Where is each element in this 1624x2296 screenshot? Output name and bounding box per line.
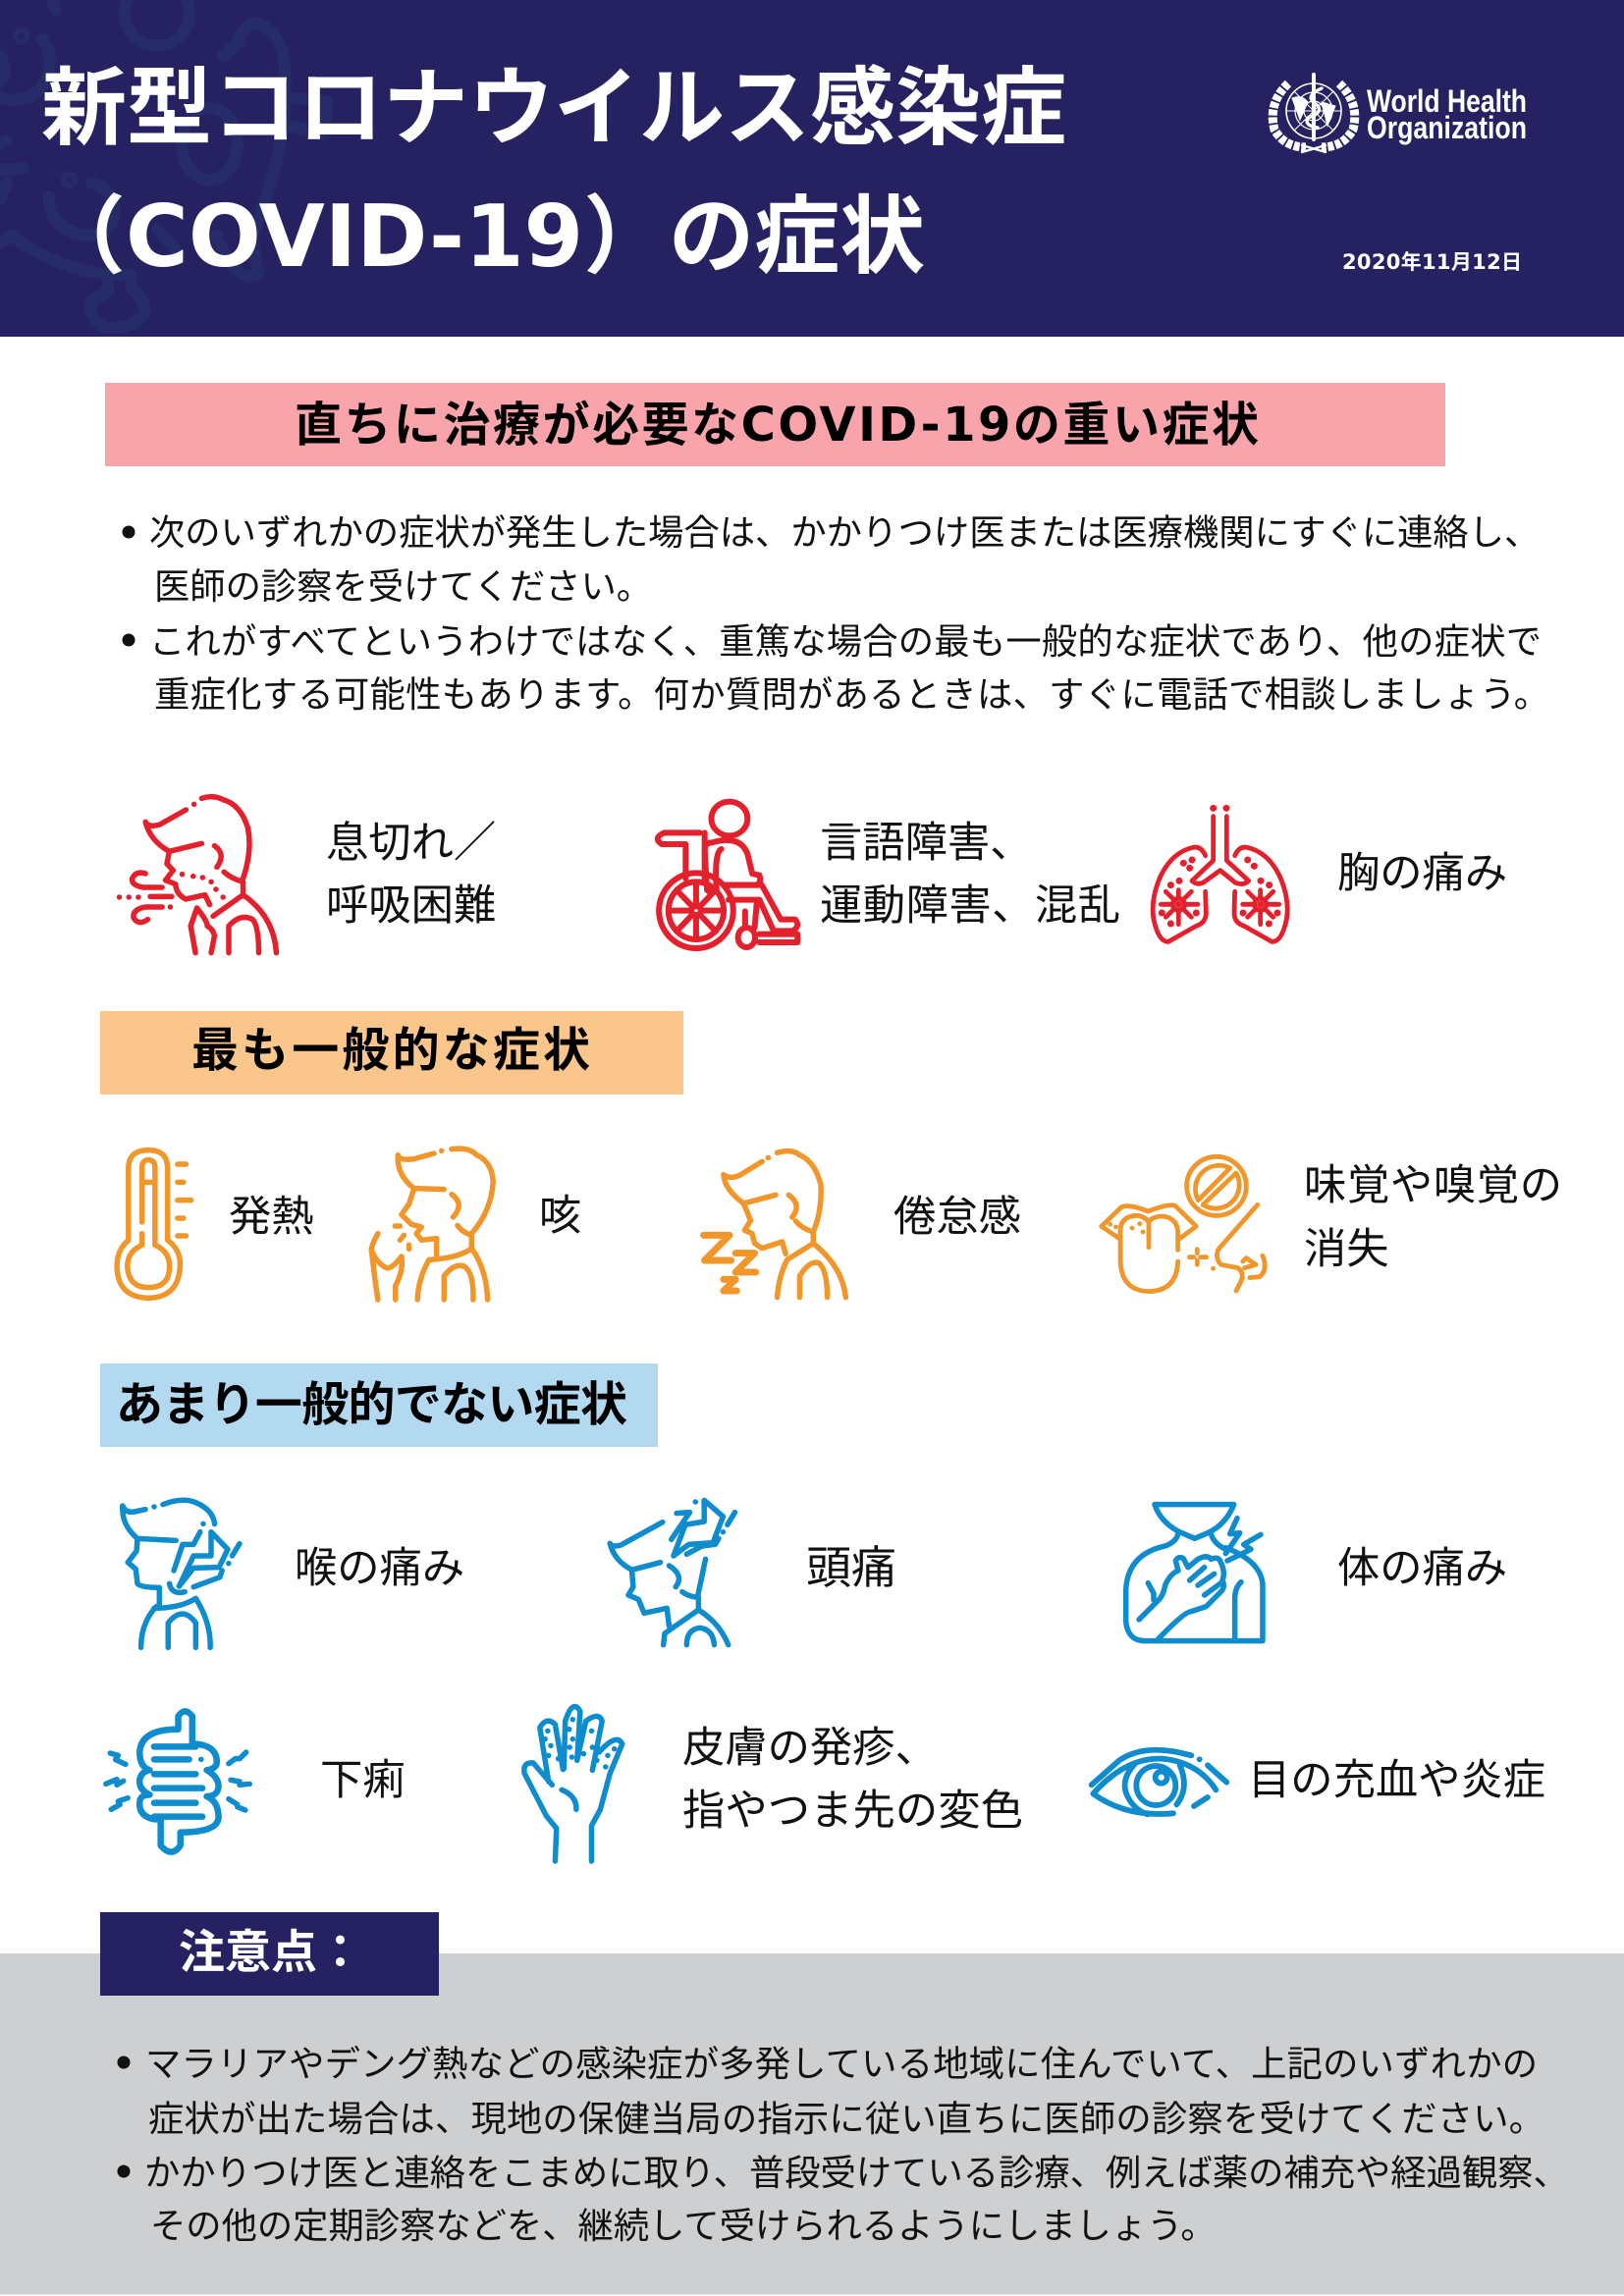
WHO wordmark — [1367, 83, 1527, 145]
icon: loss of taste and smell — [1102, 1156, 1265, 1292]
icon: thermometer — [117, 1150, 191, 1298]
panel: less common symptoms heading: あまり一般的でない症状 — [116, 1379, 627, 1431]
label: sore throat: 喉の痛み — [295, 1545, 464, 1592]
label: rash and discolouration — [682, 1725, 1023, 1835]
text block: notes: 症状が出た場合は、現地の保健当局の指示に従い直ちに医師の診察を受けてください。 — [148, 2099, 1544, 2139]
label: shortness of breath: 息切れ／ — [326, 820, 496, 867]
panel: most common symptoms heading — [100, 1011, 683, 1095]
icon: sore throat — [123, 1500, 240, 1647]
icon: hand with rash — [524, 1706, 623, 1861]
label: body aches: 体の痛み — [1337, 1545, 1507, 1592]
panel: notes heading: 注意点： — [179, 1926, 363, 1978]
label: cough: 咳 — [539, 1193, 581, 1240]
label: speech and motor impairment — [820, 820, 1120, 930]
label: rash and discolouration: 皮膚の発疹、 — [682, 1725, 938, 1772]
icon: WHO emblem — [1272, 75, 1355, 152]
icon: diarrhoea — [106, 1711, 249, 1852]
label: loss of taste and smell: 消失 — [1304, 1226, 1389, 1273]
text block: severe symptoms advice — [122, 512, 1549, 715]
text block: severe symptoms advice: 医師の診察を受けてください。 — [154, 566, 652, 607]
label: fever: 発熱 — [229, 1194, 314, 1241]
icon: cough — [371, 1148, 493, 1300]
label: loss of taste and smell — [1304, 1162, 1562, 1273]
icon: shortness of breath — [120, 797, 276, 953]
label: diarrhoea: 下痢 — [320, 1757, 406, 1804]
title: （COVID-19）の症状 — [40, 187, 925, 287]
label: chest pain: 胸の痛み — [1337, 850, 1507, 897]
text block: severe symptoms advice: 次のいずれかの症状が発生した場合は、かかりつけ医または医療機関にすぐに連絡し、 — [149, 512, 1540, 553]
panel: notes background — [0, 1953, 1624, 2295]
label: speech and motor impairment: 運動障害、混乱 — [820, 882, 1120, 930]
label: shortness of breath — [326, 820, 496, 930]
text block: severe symptoms advice: これがすべてというわけではなく、重篤な場合の最も一般的な症状であり、他の症状で — [149, 621, 1542, 662]
title — [40, 58, 1066, 287]
panel: severe symptoms heading — [105, 383, 1445, 466]
label: fatigue: 倦怠感 — [893, 1194, 1021, 1241]
icon: red eye — [1092, 1750, 1226, 1814]
icon: wheelchair — [658, 802, 797, 948]
header band — [0, 0, 1624, 337]
WHO logo — [1272, 75, 1527, 152]
date: 2020年11月12日 — [1342, 250, 1522, 274]
WHO wordmark: Organization — [1367, 110, 1527, 145]
label: shortness of breath: 呼吸困難 — [326, 882, 496, 930]
WHO wordmark: World Health — [1367, 83, 1527, 119]
text block: notes: その他の定期診察などを、継続して受けられるようにしましょう。 — [150, 2206, 1217, 2246]
label: rash and discolouration: 指やつま先の変色 — [682, 1788, 1023, 1835]
label: speech and motor impairment: 言語障害、 — [820, 820, 1032, 867]
icon: headache — [610, 1500, 734, 1645]
panel: notes heading — [100, 1912, 439, 1996]
label: loss of taste and smell: 味覚や嗅覚の — [1304, 1162, 1562, 1209]
panel: most common symptoms heading: 最も一般的な症状 — [191, 1025, 590, 1077]
label: headache: 頭痛 — [806, 1542, 896, 1593]
label: red eyes: 目の充血や炎症 — [1248, 1757, 1545, 1804]
virus background pattern — [0, 0, 327, 328]
icon: body aches — [1126, 1505, 1263, 1641]
text block: notes: かかりつけ医と連絡をこまめに取り、普段受けている診療、例えば薬の補充や経過観察、 — [144, 2153, 1569, 2193]
text block: severe symptoms advice: 重症化する可能性もあります。何か質問があるときは、すぐに電話で相談しましょう。 — [154, 674, 1549, 715]
panel: less common symptoms heading — [100, 1363, 658, 1447]
text block: notes: マラリアやデング熱などの感染症が多発している地域に住んでいて、上記のいずれかの — [145, 2044, 1538, 2084]
title: 新型コロナウイルス感染症 — [41, 58, 1066, 158]
icon: fatigue — [704, 1151, 845, 1298]
panel: severe symptoms heading: 直ちに治療が必要なCOVID-19の重い症状 — [295, 398, 1259, 453]
icon: lungs — [1153, 808, 1287, 941]
text block: notes — [118, 2044, 1569, 2246]
